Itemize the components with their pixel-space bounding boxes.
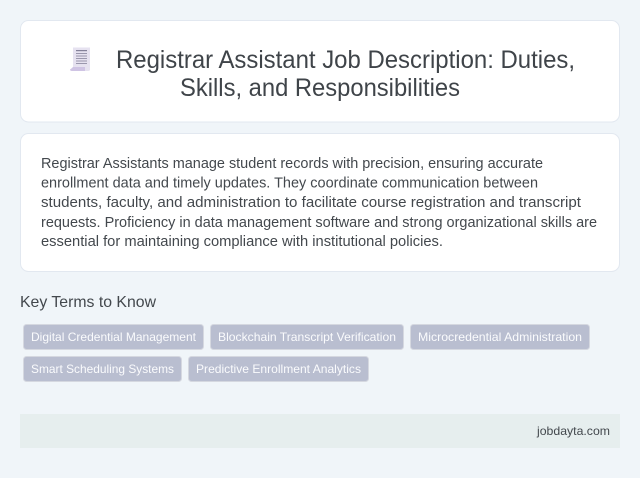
title: Skills, and Responsibilities	[180, 74, 460, 102]
chip: microcredential administration	[410, 324, 590, 350]
chips: key terms	[24, 324, 590, 382]
icon: document scroll	[70, 48, 90, 71]
title: Registrar Assistant Job Description: Duties,	[116, 46, 575, 74]
footer source text: jobdayta.com	[536, 424, 610, 438]
footer	[20, 414, 620, 448]
heading: key terms: Key Terms to Know	[20, 294, 156, 311]
chip: predictive enrollment analytics: Predictive Enrollment Analytics	[196, 362, 361, 376]
panel: header	[20, 20, 620, 122]
chip: smart scheduling systems: Smart Scheduling Systems	[31, 362, 174, 376]
text block: description: students, faculty, and administration to facilitate course registration and transcript	[41, 194, 582, 211]
chip: smart scheduling systems	[24, 356, 182, 382]
text block: description: Registrar Assistants manage student records with precision, ensuring accurate	[41, 155, 543, 172]
text block: description: essential for maintaining compliance with institutional policies.	[41, 233, 443, 250]
chip: digital credential management	[24, 324, 204, 350]
text block: description	[41, 155, 597, 250]
chip: digital credential management: Digital Credential Management	[31, 330, 197, 344]
chip: blockchain transcript verification: Blockchain Transcript Verification	[218, 330, 396, 344]
title	[116, 46, 575, 102]
panel: description	[20, 134, 620, 272]
text block: description: requests. Proficiency in data management software and strong organizational skills are	[41, 214, 597, 231]
chip: microcredential administration: Microcredential Administration	[418, 330, 582, 344]
chip: blockchain transcript verification	[210, 324, 404, 350]
text block: description: enrollment data and timely updates. They coordinate communication between	[41, 174, 538, 192]
chip: predictive enrollment analytics	[188, 356, 368, 382]
